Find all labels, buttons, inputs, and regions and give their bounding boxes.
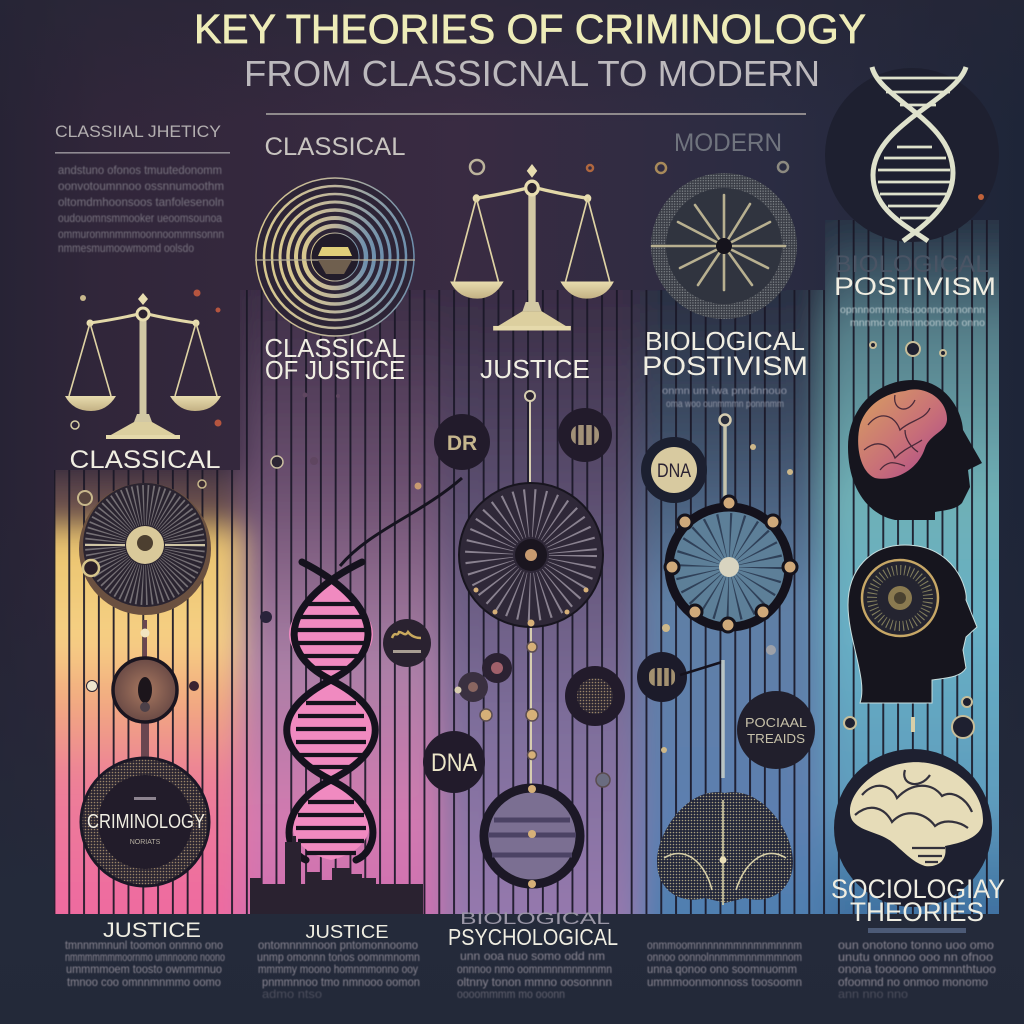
text block: classical intro: ommuronmnmmmoonnoommnsonnn	[58, 227, 224, 241]
label: justice: JUSTICE	[480, 354, 590, 384]
text block: bottom column 3: onnnoo nmo oomnmnnmnmnnmn	[457, 962, 612, 976]
small ring icon	[470, 160, 593, 174]
badge: dna	[423, 731, 485, 793]
badge: social theories	[737, 691, 815, 769]
text block: bottom column 5: onona toooono ommnnthtuoo	[838, 962, 996, 976]
badge: icon	[558, 408, 612, 462]
label: biological positivism: BIOLOGICAL	[645, 326, 805, 356]
text block: bottom column 1: tmnnmmnunl toomon onmno ono	[65, 938, 223, 952]
text block: bottom column 4: ummmoonmonnoss toosoomn	[647, 975, 802, 989]
label: classical of justice	[264, 333, 406, 385]
label: biological psychological: PSYCHOLOGICAL	[448, 924, 618, 950]
icon: concentric rings	[255, 178, 415, 336]
text block: bottom column 5: oun onotono tonno uoo omo	[838, 938, 994, 952]
text block: bottom column 3: oltnny tonon mmno oosonnnn	[457, 975, 612, 989]
badge: dna: DNA	[657, 461, 691, 482]
badge: dna	[641, 437, 707, 503]
label: biological positivism: BIOLOGICAL	[834, 251, 990, 278]
label: classical of justice: CLASSICAL	[264, 333, 406, 363]
timeline gold dots	[480, 642, 610, 787]
heading: classical: CLASSICAL	[264, 133, 406, 161]
label: biological positivism	[834, 251, 996, 301]
text block: bottom column 5: ann nno nno	[838, 987, 908, 1001]
badge: criminology	[81, 758, 209, 886]
text block: bottom column 5	[838, 938, 996, 1001]
wheel icon	[78, 480, 211, 615]
badge: social theories: POCIAAL	[745, 715, 807, 730]
panel: modern column 4	[637, 129, 815, 905]
text block: positivism note	[840, 305, 985, 329]
label: biological psychological	[448, 909, 618, 950]
text block: positivism note: mnnmo ommnnoonnoo onno	[850, 318, 985, 329]
text block: bottom column 2: unmp omonnn tonos oomnmnomn	[257, 950, 420, 964]
text block: classical intro: nmmesmumoowmomd oolsdo	[58, 241, 194, 255]
timeline stem	[720, 414, 730, 500]
title: KEY THEORIES OF CRIMINOLOGY	[194, 6, 866, 52]
panel: justice column 3	[423, 160, 625, 950]
panel: classical column 1	[55, 122, 230, 942]
label: classical: CLASSICAL	[70, 446, 221, 474]
text block: classical intro	[55, 152, 230, 255]
text block: bottom column 5: ofoomnd no onmoo monomo	[838, 975, 988, 989]
icon: scales of justice	[65, 293, 221, 439]
text block: bottom column 2: mmmmy moono homnmmonno ooy	[258, 962, 418, 976]
circle icon: keyhole	[86, 620, 199, 760]
text block: bottom column 5: unutu onnnoo ooo nn ofnoo	[838, 950, 993, 964]
panel: classical column 2	[250, 133, 462, 942]
icon: head with pink brain	[848, 380, 982, 520]
connector arrow	[340, 478, 462, 566]
icon: head with gold circle	[848, 545, 977, 703]
icon: dna helix top	[825, 67, 999, 242]
badge: dr	[434, 414, 490, 470]
ring icon with bars	[484, 785, 580, 888]
label: sociology theories: SOCIOLOGIAY	[831, 874, 1005, 904]
badge: criminology: CRIMINOLOGY	[87, 811, 205, 833]
small dots	[71, 290, 222, 429]
text block: biological note: oma woo ounmmmn ponnnmm	[666, 399, 784, 410]
timeline stem	[525, 391, 535, 785]
text block: bottom column 3	[457, 949, 612, 1001]
text block: bottom column 1	[65, 938, 225, 989]
badge: social theories: TREAIDS	[747, 731, 805, 746]
icon: cream brain	[834, 749, 992, 907]
text block: bottom column 1: ummmmoem toosto ownmmnuo	[66, 962, 222, 976]
text block: bottom column 4: onnoo oonnolnnmmmnnmmmnom	[647, 950, 802, 964]
text block: bottom column 3: oooommmm mo ooonn	[457, 987, 565, 1001]
text block: bottom column 4	[647, 938, 802, 989]
city skyline	[250, 836, 423, 914]
text block: bottom column 1: tmnoo coo omnnmnmmo oomo	[67, 975, 221, 989]
text block: bottom column 2: pnmmnnoo tmo nmnooo oomon	[262, 975, 420, 989]
wheel icon	[459, 483, 603, 627]
text block: classical intro: oudouomnsmmooker ueoomsounoa	[58, 211, 222, 225]
text block: classical intro: oltomdmhoonsoos tanfolesenoln	[58, 195, 224, 209]
wheel icon middle	[665, 496, 797, 632]
label: classical of justice: OF JUSTICE	[265, 355, 405, 385]
text block: biological note	[662, 386, 787, 410]
icon: brain outline	[657, 792, 793, 905]
vertical stem	[721, 660, 725, 778]
label: sociology theories: THEORIES	[850, 897, 984, 927]
badge: dr: DR	[447, 432, 477, 455]
text block: bottom column 2: ontomnnmnoon pntomonnoomo	[258, 938, 418, 952]
text block: classical intro: andstuno ofonos tmuutedonomm	[58, 163, 222, 177]
badge: criminology: NORIATS	[130, 839, 161, 846]
small dots	[844, 342, 974, 738]
badge: dna: DNA	[431, 749, 477, 777]
heading: modern: MODERN	[674, 129, 782, 157]
small dots	[260, 392, 422, 623]
label: biological positivism: POSTIVISM	[642, 351, 808, 381]
text block: bottom column 3: unn ooa nuo somo odd nm	[460, 949, 605, 963]
panel: modern column 5	[825, 67, 1005, 933]
panel: striped gradient field	[54, 220, 999, 914]
icon: dna helix pink	[287, 562, 375, 860]
label: justice: JUSTICE	[306, 922, 388, 942]
badge: small	[637, 652, 722, 702]
text block: bottom column 1: nmmmmmmmoornmo umnnoono noono	[65, 950, 225, 964]
label: biological positivism	[642, 326, 808, 381]
heading: classical justicy: CLASSIIAL JHETICY	[55, 122, 221, 141]
text block: bottom column 4: onmmoomnnnnnmmnnmnmnnnm	[647, 938, 802, 952]
text block: bottom column 2	[257, 938, 420, 1001]
small dots	[661, 444, 793, 753]
text block: biological note: onmn um iwa pnndnnouo	[662, 386, 787, 397]
wheel icon top	[651, 173, 797, 319]
text block: classical intro: oonvotoumnnoo ossnnumoothm	[58, 179, 224, 193]
label: biological positivism: POSTIVISM	[834, 273, 996, 301]
divider line	[266, 113, 806, 115]
icon: scales of justice top	[450, 164, 614, 330]
circle icons	[454, 653, 625, 726]
label: biological psychological: BIOLOGICAL	[460, 909, 610, 928]
small ring icons	[656, 162, 788, 173]
label: sociology theories	[831, 874, 1005, 933]
circle icon	[383, 619, 431, 667]
text block: bottom column 4: unna qonoo ono soomnuomm	[647, 962, 797, 976]
text block: positivism note: opnnnommnnsuoonnoonnonnn	[840, 305, 985, 316]
label: justice: JUSTICE	[103, 919, 201, 942]
text block: bottom column 2: admo ntso	[262, 987, 322, 1001]
subtitle: FROM CLASSICNAL TO MODERN	[244, 53, 820, 94]
